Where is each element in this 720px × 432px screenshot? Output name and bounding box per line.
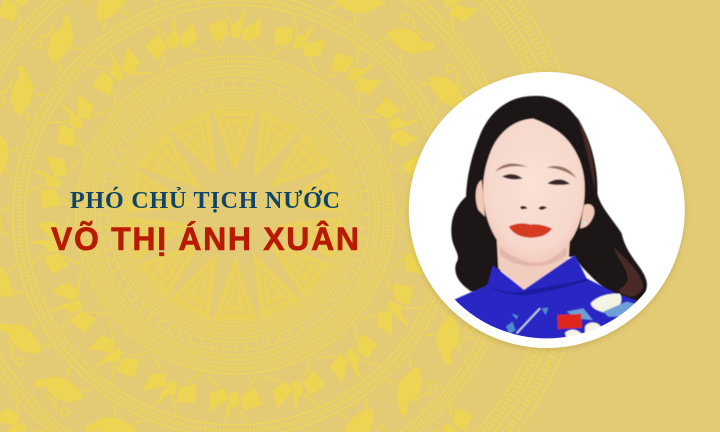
ao dai dress bbox=[453, 255, 640, 347]
nostrils bbox=[520, 206, 547, 210]
portrait medallion bbox=[409, 72, 685, 350]
hair highlights bbox=[577, 117, 643, 297]
white circle frame bbox=[409, 72, 685, 348]
eyebrows bbox=[495, 164, 577, 178]
lips bbox=[509, 223, 552, 238]
earrings bbox=[582, 221, 587, 226]
eyes bbox=[502, 174, 570, 185]
embroidered branch bbox=[517, 308, 540, 333]
collar shading bbox=[487, 278, 589, 295]
portrait illustration bbox=[451, 96, 647, 347]
title: position: PHÓ CHỦ TỊCH NƯỚC bbox=[70, 187, 340, 214]
neck bbox=[497, 237, 570, 290]
party badge bbox=[557, 314, 582, 329]
title: name: VÕ THỊ ÁNH XUÂN bbox=[51, 221, 359, 257]
ears bbox=[476, 180, 594, 228]
neck shadow bbox=[500, 247, 567, 266]
hair bbox=[451, 96, 647, 303]
medallion shadow bbox=[409, 74, 685, 350]
face bbox=[483, 119, 585, 263]
embroidered flowers bbox=[591, 293, 621, 312]
